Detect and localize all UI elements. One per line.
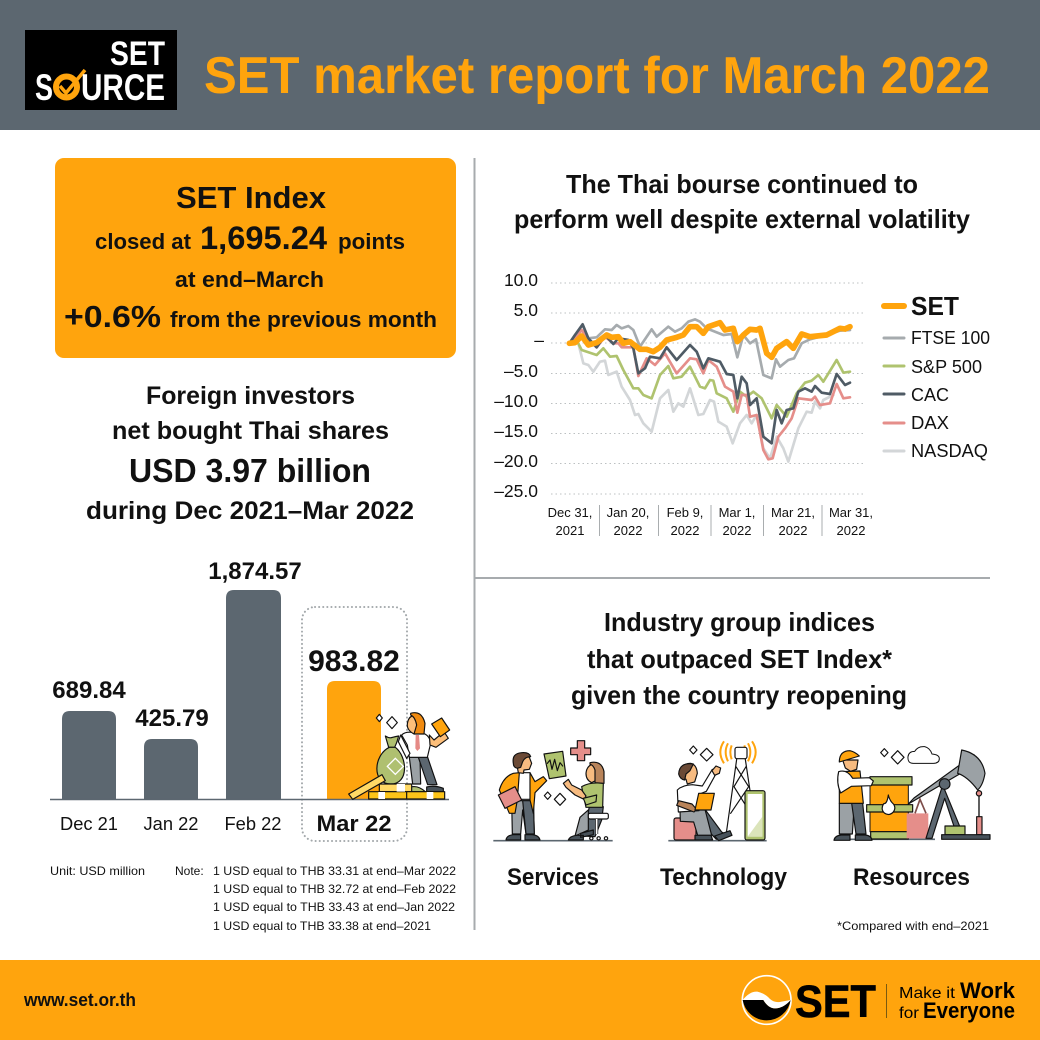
notes: unit and exchange rates (50, 864, 456, 933)
x axis labels: 2022 (723, 523, 751, 538)
bar: Dec 21 (62, 711, 116, 799)
notes: unit and exchange rates: 1 USD equal to THB 33.31 at end–Mar 2022 (213, 864, 456, 878)
notes: unit and exchange rates: 1 USD equal to THB 32.72 at end–Feb 2022 (213, 882, 456, 896)
heading: Thai bourse: The Thai bourse continued to (566, 169, 918, 199)
line: CAC (569, 324, 850, 443)
legend: DAX (911, 413, 949, 433)
heading: foreign investors: net bought Thai shares (112, 417, 389, 445)
x axis labels: Dec 31, (548, 505, 592, 520)
bar: Mar 22 (327, 681, 381, 799)
heading: foreign investors (86, 382, 414, 525)
heading: foreign investors: USD 3.97 billion (129, 452, 371, 489)
logo: SET Source: SET (110, 35, 165, 73)
notes: unit and exchange rates: Unit: USD million (50, 864, 145, 878)
icon: technology (668, 741, 767, 841)
value labels: 1,874.57 (208, 558, 302, 585)
heading: Thai bourse: perform well despite external volatility (514, 204, 971, 234)
heading: industry groups (571, 607, 907, 710)
y axis labels: 10.0 (504, 270, 538, 290)
icon: services (493, 741, 613, 841)
tagline (899, 978, 1016, 1023)
heading: foreign investors: Foreign investors (146, 382, 355, 410)
x axis labels: Mar 31, (829, 505, 873, 520)
heading: foreign investors: during Dec 2021–Mar 2022 (86, 497, 414, 525)
y axis labels: – (534, 330, 544, 350)
y axis labels (494, 270, 544, 501)
value labels (52, 558, 400, 732)
panel: SET Index summary: 1,695.24 (200, 220, 327, 256)
x axis labels: 2022 (779, 523, 807, 538)
legend: SET (911, 291, 959, 321)
month labels: Dec 21 (60, 814, 118, 834)
panel: SET Index summary: from the previous month (170, 307, 437, 332)
notes: unit and exchange rates: Note: (175, 864, 204, 878)
month labels (60, 811, 392, 836)
tagline: Work (960, 978, 1016, 1003)
tagline: for (899, 1005, 920, 1022)
x axis labels: 2022 (614, 523, 642, 538)
x axis labels (548, 505, 873, 538)
logo: SET Source: S (35, 67, 53, 108)
panel: SET Index summary: at end–March (175, 267, 324, 292)
icon: investor with money bag and coins (349, 713, 450, 799)
legend: S&P 500 (911, 357, 982, 377)
notes: unit and exchange rates: 1 USD equal to THB 33.43 at end–Jan 2022 (213, 900, 455, 914)
value labels: 689.84 (52, 677, 126, 704)
line: FTSE 100 (569, 319, 850, 378)
bar chart: foreign net buying (50, 558, 450, 841)
header band (0, 0, 1040, 130)
icon: resources (834, 747, 990, 840)
legend (884, 291, 990, 461)
y axis labels: –15.0 (494, 421, 538, 441)
legend: NASDAQ (911, 441, 988, 461)
icon labels: Services (507, 864, 599, 891)
panel: SET Index summary: points (338, 229, 405, 254)
notes: unit and exchange rates: 1 USD equal to THB 33.38 at end–2021 (213, 919, 431, 933)
y axis labels: –20.0 (494, 451, 538, 471)
line chart: index performance (494, 270, 990, 538)
highlight box: Mar 22 (302, 607, 407, 841)
legend: FTSE 100 (911, 328, 990, 348)
website: www.set.or.th (23, 990, 136, 1010)
footer band (0, 960, 1040, 1040)
panel: SET Index summary: SET Index (176, 180, 327, 215)
panel: SET Index summary (55, 158, 456, 358)
x axis labels: Jan 20, (607, 505, 649, 520)
y axis labels: –25.0 (494, 481, 538, 501)
month labels: Feb 22 (224, 814, 282, 834)
month labels: Mar 22 (316, 811, 392, 836)
x axis labels: Feb 9, (667, 505, 703, 520)
heading: industry groups: Industry group indices (604, 607, 875, 637)
bar: Feb 22 (226, 590, 281, 799)
line: NASDAQ (569, 343, 833, 462)
x axis labels: 2021 (556, 523, 584, 538)
tagline: Make it (899, 985, 956, 1002)
value labels: 425.79 (135, 705, 209, 732)
heading: Thai bourse (514, 169, 971, 234)
line: SET (569, 323, 850, 357)
y axis labels: –5.0 (504, 361, 538, 381)
footnote: *Compared with end–2021 (837, 919, 989, 933)
x axis labels: Mar 1, (719, 505, 755, 520)
tagline: Everyone (923, 998, 1015, 1023)
bar: Jan 22 (144, 739, 198, 799)
logo: SET Source: URCE (81, 67, 165, 108)
icon labels: Resources (853, 864, 970, 891)
heading: industry groups: that outpaced SET Index* (587, 644, 893, 674)
panel: SET Index summary: closed at (95, 229, 192, 254)
logo: SET: SET (795, 976, 876, 1027)
y axis labels: –10.0 (494, 391, 538, 411)
logo: SET (742, 976, 876, 1027)
x axis labels: 2022 (837, 523, 865, 538)
y axis labels: 5.0 (514, 300, 538, 320)
logo: SET Source (25, 30, 177, 110)
icon labels: Technology (660, 864, 788, 891)
line: DAX (569, 330, 850, 459)
value labels: 983.82 (308, 645, 400, 678)
month labels: Jan 22 (144, 814, 198, 834)
x axis labels: Mar 21, (771, 505, 815, 520)
title: SET market report for March 2022 (204, 47, 990, 105)
heading: industry groups: given the country reopening (571, 680, 907, 710)
line: S&P 500 (569, 342, 850, 418)
legend: CAC (911, 385, 949, 405)
icon labels (507, 864, 970, 891)
panel: SET Index summary: +0.6% (64, 299, 161, 334)
series lines (569, 319, 850, 462)
x axis labels: 2022 (671, 523, 699, 538)
